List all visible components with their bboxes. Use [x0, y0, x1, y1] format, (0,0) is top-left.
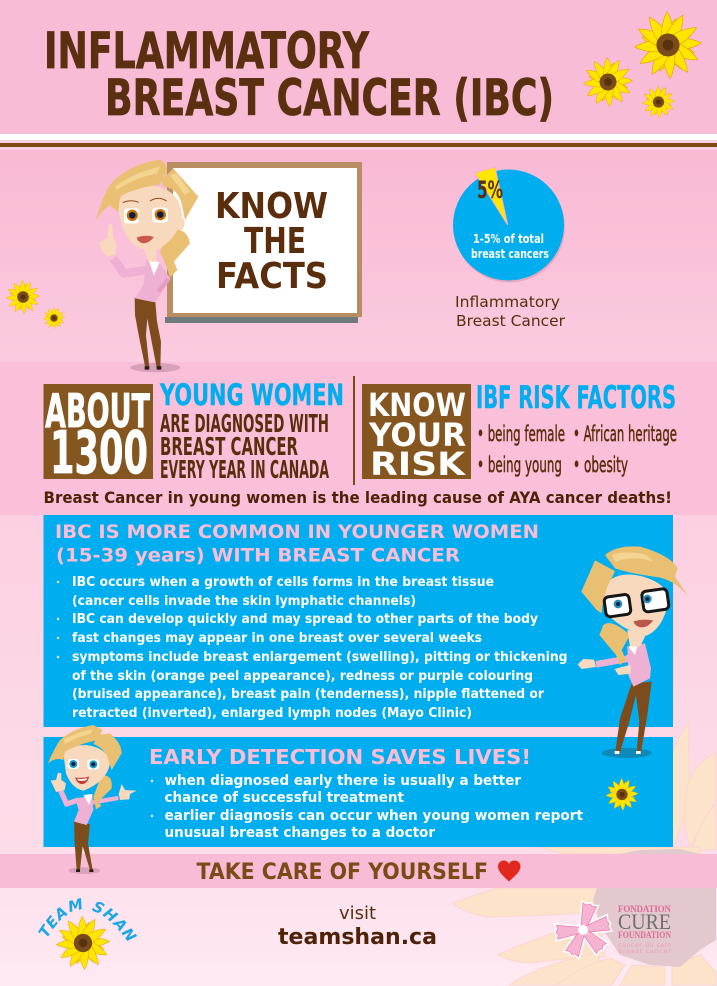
- divider: brown rule: [0, 143, 717, 147]
- early detection bullets: when diagnosed early there is usually a better: [164, 773, 521, 789]
- cure foundation wordmark: FONDATION: [618, 904, 672, 914]
- panel bullet list: IBC can develop quickly and may spread to other parts of the body: [72, 612, 538, 627]
- pie wedge label: 5%: [477, 176, 503, 204]
- panel heading: (15-39 years) WITH BREAST CANCER: [56, 544, 460, 566]
- early detection bullets: unusual breast changes to a doctor: [164, 825, 435, 841]
- visit website: [278, 903, 437, 950]
- board text: [215, 186, 328, 297]
- pie caption: Inflammatory: [455, 293, 560, 311]
- divider: vertical: [353, 376, 355, 485]
- logo: team shan: [38, 898, 138, 970]
- character: woman with glasses: [578, 546, 688, 758]
- icon: sunflowers top right: [584, 11, 701, 118]
- cure foundation wordmark: CURE: [618, 909, 671, 934]
- know the facts board: [165, 162, 362, 323]
- know your risk box: YOUR: [368, 416, 466, 454]
- stat: about 1300: [44, 384, 153, 487]
- text: young women diagnosed: EVERY YEAR IN CANADA: [160, 455, 329, 484]
- know your risk box: KNOW: [368, 386, 466, 424]
- pie caption: [455, 293, 566, 330]
- character: woman thumbs up: [48, 725, 137, 874]
- band: take care of yourself: TAKE CARE OF YOURSELF: [196, 860, 488, 885]
- background sunflower: [452, 722, 716, 985]
- icon: sunflowers left: [6, 280, 65, 329]
- visit website: teamshan.ca: [278, 925, 437, 950]
- cure foundation wordmark: cancer du sein: [618, 941, 671, 949]
- early detection heading: EARLY DETECTION SAVES LIVES!: [149, 745, 531, 769]
- cure foundation wordmark: FOUNDATION: [618, 930, 671, 940]
- character: woman pointing up: [95, 160, 198, 372]
- know your risk box: [362, 384, 471, 483]
- panel bullet list: [57, 575, 568, 721]
- title: BREAST CANCER (IBC): [105, 69, 554, 127]
- early detection bullets: chance of successful treatment: [164, 790, 404, 806]
- know your risk box: RISK: [370, 445, 466, 483]
- board text: FACTS: [216, 256, 328, 297]
- pie caption: Breast Cancer: [456, 312, 566, 330]
- text: young women diagnosed: BREAST CANCER: [160, 432, 298, 461]
- risk factors list: • being female: [477, 422, 565, 446]
- board text: KNOW: [215, 186, 328, 227]
- icon: heart: [498, 860, 520, 882]
- text: young women diagnosed: [159, 378, 344, 484]
- board text: THE: [244, 221, 306, 262]
- text: young women diagnosed: ARE DIAGNOSED WITH: [160, 409, 329, 438]
- title: [44, 22, 554, 127]
- panel bullet list: IBC occurs when a growth of cells forms in the breast tissue: [72, 575, 494, 590]
- panel bullet list: of the skin (orange peel appearance), redness or purple colouring: [72, 669, 533, 684]
- early detection bullets: [151, 773, 583, 841]
- early detection bullets: earlier diagnosis can occur when young women report: [164, 808, 583, 824]
- cure foundation wordmark: [618, 904, 672, 955]
- panel bullet list: symptoms include breast enlargement (swelling), pitting or thickening: [72, 650, 568, 665]
- visit website: visit: [339, 903, 376, 924]
- panel bullet list: retracted (inverted), enlarged lymph nodes (Mayo Clinic): [72, 706, 472, 721]
- logo: team shan: TEAM SHAN: [38, 898, 138, 941]
- band: take care of yourself: [0, 854, 717, 888]
- panel: early detection: [44, 737, 673, 847]
- icon: sunflower in panel: [606, 778, 638, 811]
- stat: about 1300: ABOUT: [45, 384, 150, 438]
- pie chart: [453, 167, 565, 282]
- text: young women diagnosed: YOUNG WOMEN: [159, 378, 344, 412]
- panel heading: IBC IS MORE COMMON IN YOUNGER WOMEN: [55, 521, 539, 543]
- panel bullet list: fast changes may appear in one breast over several weeks: [72, 631, 482, 646]
- title: INFLAMMATORY: [44, 22, 370, 80]
- pie centre label: 1-5% of total: [473, 232, 544, 246]
- pink ribbon flower: [555, 902, 611, 957]
- panel bullet list: (cancer cells invade the skin lymphatic channels): [72, 594, 416, 609]
- risk factors list: [476, 380, 677, 477]
- logo: cure foundation: [555, 902, 672, 957]
- pie centre label: [471, 232, 549, 261]
- panel bullet list: (bruised appearance), breast pain (tenderness), nipple flattened or: [72, 687, 545, 702]
- cure foundation wordmark: breast cancer: [618, 947, 671, 955]
- panel: IBC more common: [44, 515, 673, 727]
- panel heading: [55, 521, 539, 566]
- pie centre label: breast cancers: [471, 247, 549, 261]
- risk factors list: • being young: [477, 453, 562, 477]
- risk factors list: • obesity: [573, 453, 628, 477]
- statement: leading cause: Breast Cancer in young women is the leading cause of AYA cancer deaths!: [44, 488, 672, 507]
- stat: about 1300: 1300: [50, 418, 148, 487]
